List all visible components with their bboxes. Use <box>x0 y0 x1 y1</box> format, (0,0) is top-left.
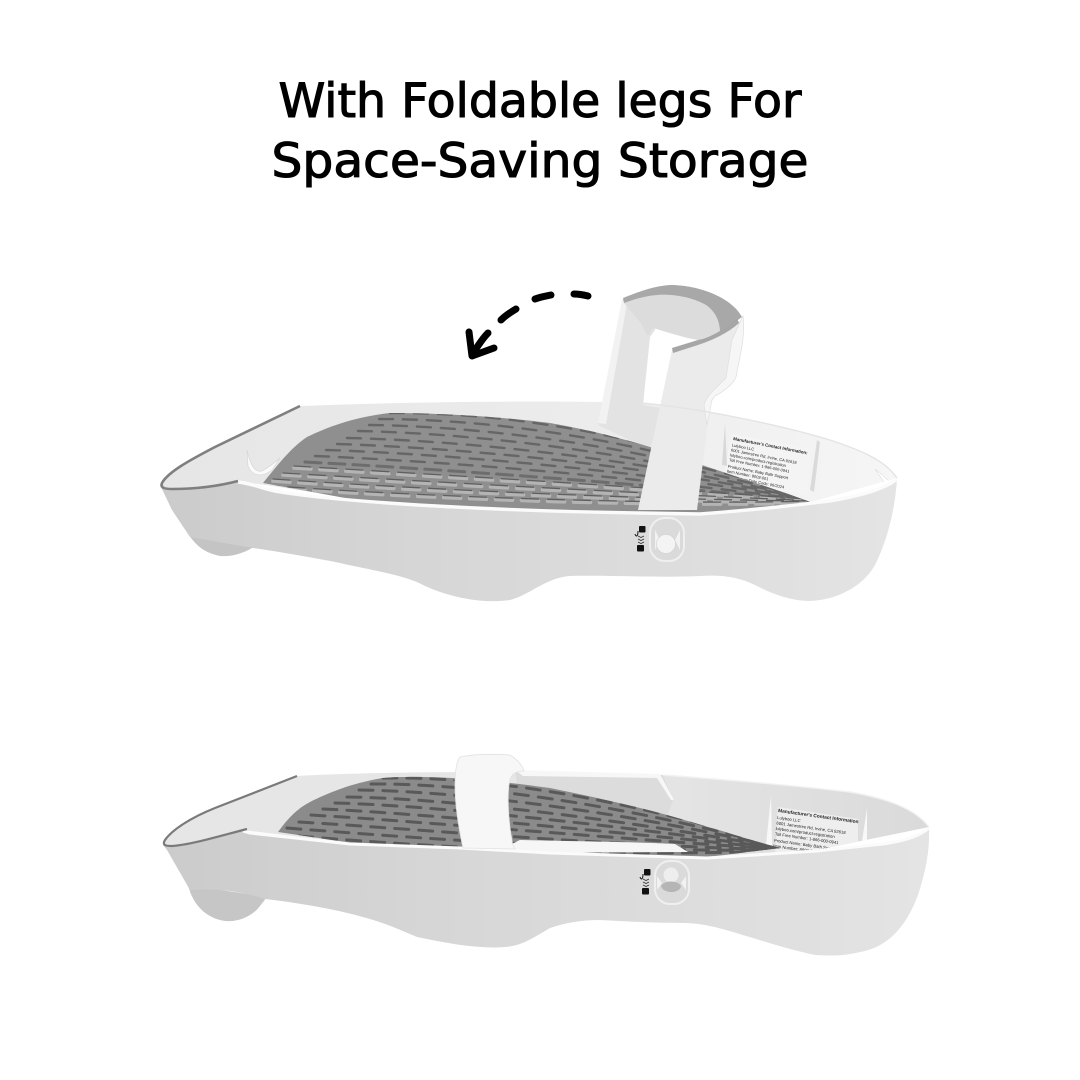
leg: hoop interior <box>624 295 720 340</box>
product: tray with leg unfolded <box>161 285 897 601</box>
grey rubber lip <box>162 406 300 489</box>
rim highlight <box>238 479 897 514</box>
title: With Foldable legs For <box>278 74 802 129</box>
rim highlight <box>243 828 929 858</box>
rear rim right <box>640 403 897 478</box>
tray interior <box>163 772 929 857</box>
care label <box>722 426 888 492</box>
tray outer shell <box>163 827 929 956</box>
title <box>272 74 808 189</box>
care label: Made in China Ningbo <box>725 478 765 491</box>
arrow: fold direction <box>469 294 588 356</box>
leg: inner grey edge <box>623 285 742 333</box>
lock socket <box>650 518 684 561</box>
care label: Item Number: 8003-001 <box>727 468 770 482</box>
care label: 6001 Jamestree Rd, Irvine, CA 92618 <box>776 820 847 835</box>
care label: Toll Free Number: 1-866-000-0941 <box>775 831 840 845</box>
mesh seat <box>275 777 790 858</box>
leg: rear arm <box>598 290 662 450</box>
product: tray with leg folded <box>163 754 929 956</box>
leg: front arm <box>638 320 741 510</box>
care label: Item Number: 8003-001 <box>773 843 818 854</box>
care label: Product Name: Baby Bath Support <box>727 464 790 480</box>
care label: Lulyboo LLC <box>732 442 755 452</box>
folded leg strap <box>455 754 524 849</box>
interior notch <box>247 450 280 475</box>
lock socket <box>655 861 689 904</box>
care label <box>766 798 867 852</box>
icon: lock symbols <box>635 526 646 552</box>
folding foot <box>188 885 267 921</box>
care label: lulyboo.com/product-registration <box>730 452 786 468</box>
handle: front rail <box>505 840 688 853</box>
care label: Lulyboo LLC <box>777 815 801 823</box>
care label: 6001 Jamestree Rd, Irvine, CA 92618 <box>731 447 798 465</box>
care label: Product Name: Baby Bath Support <box>774 838 839 852</box>
folding foot <box>186 530 255 556</box>
grey rubber lip <box>164 776 297 846</box>
tray outer shell <box>161 478 897 601</box>
handle: upper rail <box>515 772 673 816</box>
care label: Manufacturer's Contact Information: <box>733 436 809 456</box>
rear rim right <box>663 775 929 827</box>
tray interior <box>162 402 897 513</box>
icon: lock symbols <box>640 869 650 894</box>
care label: Manufacturer's Contact Information <box>778 808 859 825</box>
care label: Manufacture Date Code: 06/2024 <box>726 473 785 490</box>
care label: lulyboo.com/product-registration <box>775 826 836 839</box>
care label: Toll Free Number: 1-866-000-0941 <box>729 457 791 474</box>
title: Space-Saving Storage <box>272 134 808 189</box>
mesh seat <box>262 413 820 515</box>
